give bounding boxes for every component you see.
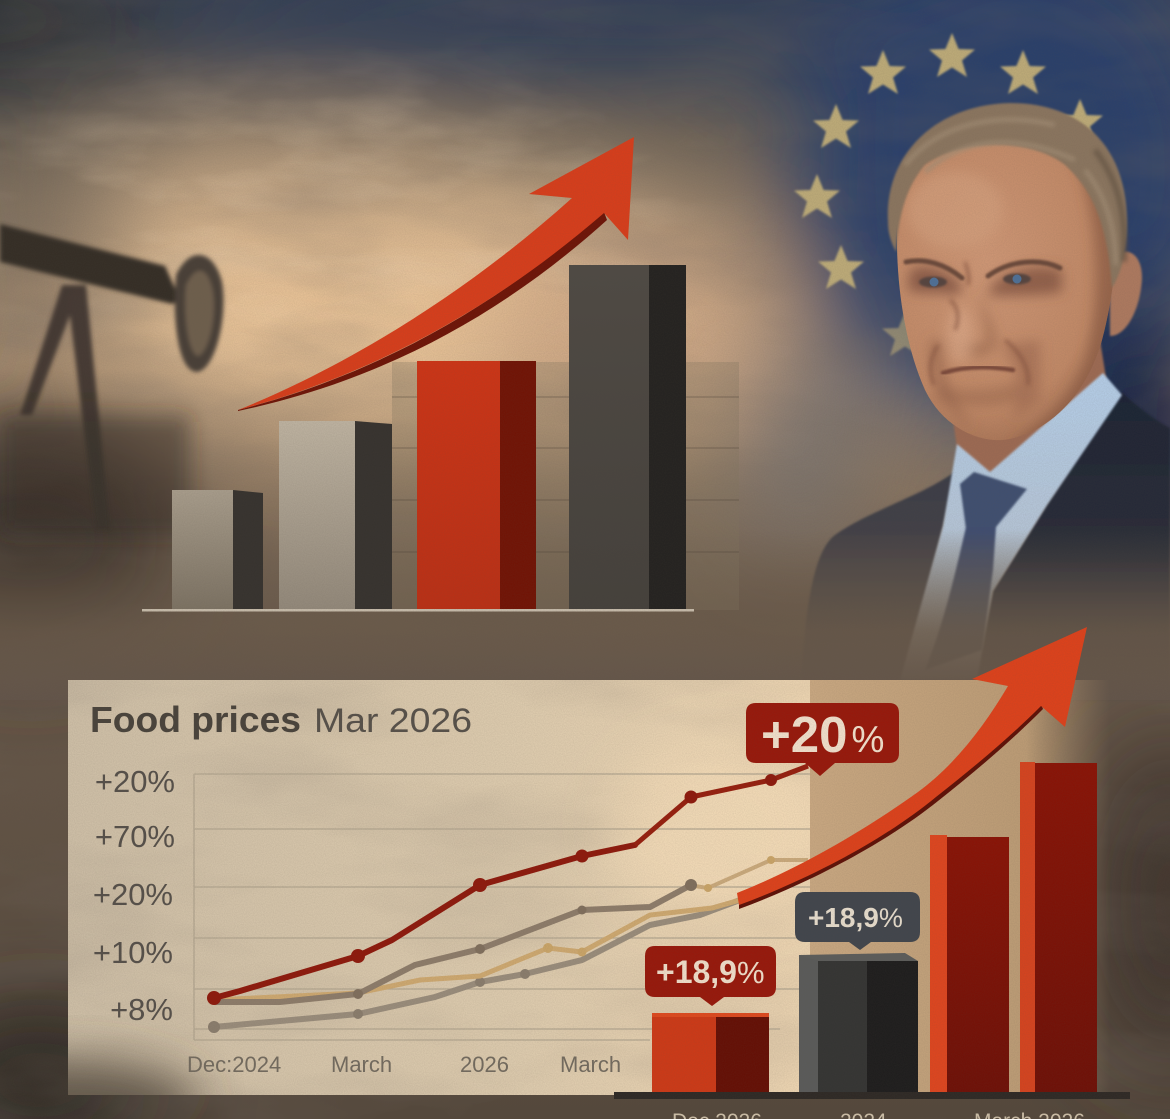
callout: +20%: +20% (761, 706, 884, 763)
baseline (142, 609, 694, 612)
line: brown (214, 879, 697, 1002)
suit left shoulder (800, 470, 957, 700)
bar 3 red (417, 361, 536, 609)
mouth (943, 367, 1013, 373)
EU flag stars (794, 33, 1103, 356)
heading: Food prices (90, 699, 301, 740)
y axis labels (93, 764, 175, 1027)
faded background bar and grid (392, 362, 739, 610)
callout: +20% (746, 703, 899, 776)
lower bar chart (614, 762, 1130, 1119)
y axis labels: +8% (110, 992, 173, 1027)
panel: food prices chart (68, 680, 1102, 1095)
callout: +18,9% grey: +18,9% (808, 902, 903, 933)
panel paper (68, 680, 810, 1095)
icon: oil pumpjack silhouette (0, 224, 223, 535)
upper bar chart (142, 265, 739, 612)
portrait: man in dark suit (800, 103, 1170, 700)
y axis labels: +10% (93, 935, 173, 970)
line: red food prices (207, 766, 808, 1005)
upper red arrow (238, 137, 634, 411)
y axis labels: +20% (93, 877, 173, 912)
suit right side (970, 392, 1170, 700)
y axis labels: +70% (95, 819, 175, 854)
bar 1 (172, 490, 263, 609)
line: grey lower (208, 900, 740, 1033)
brows and eyes (906, 261, 1060, 288)
panel right tan extension (810, 680, 1110, 1095)
y axis labels: +20% (95, 764, 175, 799)
x axis labels: 2026 (460, 1052, 509, 1077)
shirt and collar (900, 373, 1122, 680)
x axis labels (187, 1052, 621, 1077)
lower red arrow (737, 627, 1087, 909)
ear (1110, 252, 1142, 336)
face with shading (897, 144, 1112, 440)
callout: +18,9% red (645, 946, 776, 1006)
bar B dark (799, 953, 918, 1092)
bar C red (930, 835, 1009, 1092)
x axis labels clipped at the edge (672, 1110, 1085, 1119)
line: tan (214, 856, 808, 1000)
bar A red (652, 1013, 769, 1092)
heading date: Mar 2026 (314, 702, 472, 740)
x axis labels: March (331, 1052, 392, 1077)
baseline (614, 1092, 1130, 1099)
grid lines (194, 774, 810, 1040)
callout: +18,9% red: +18,9% (656, 954, 765, 990)
x axis labels: Dec:2024 (187, 1052, 281, 1077)
hair (888, 103, 1127, 288)
callout: +18,9% grey (795, 892, 920, 950)
smoke fade across the scene bottom (0, 530, 1170, 700)
x axis labels: March (560, 1052, 621, 1077)
bar D red (1020, 762, 1097, 1092)
tie (925, 472, 1027, 670)
bar 4 dark (569, 265, 686, 609)
neck (950, 340, 1106, 474)
bar 2 (279, 421, 392, 609)
